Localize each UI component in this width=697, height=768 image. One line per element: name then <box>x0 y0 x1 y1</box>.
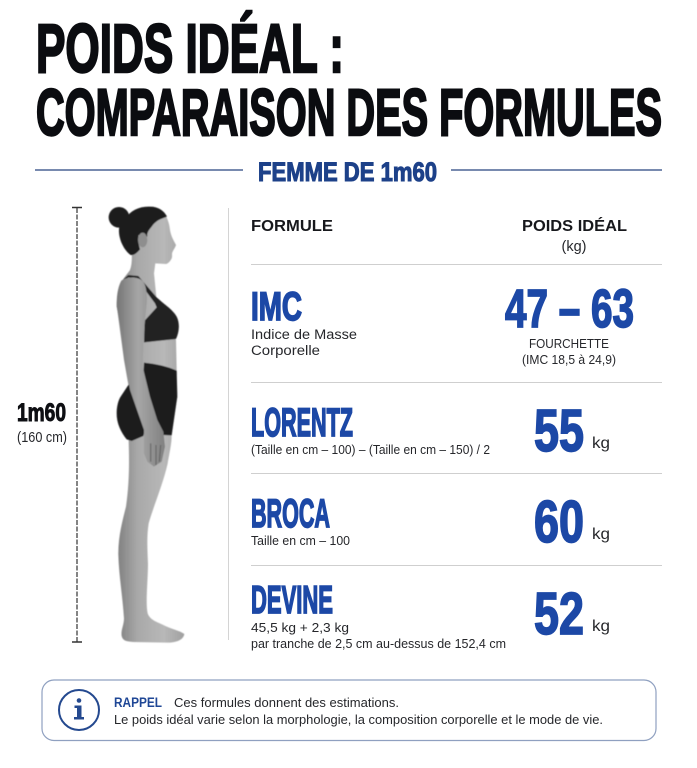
callout: rappel: Le poids idéal varie selon la morphologie, la composition corporelle et le mode de vie. <box>114 713 603 727</box>
height label: (160 cm) <box>17 429 67 446</box>
row: Broca: kg <box>592 526 610 543</box>
callout: rappel: RAPPEL <box>114 695 162 710</box>
height label <box>17 399 67 446</box>
row: Lorentz: LORENTZ <box>251 401 353 445</box>
row: IMC: FOURCHETTE <box>529 337 609 351</box>
row: Broca: BROCA <box>251 492 330 536</box>
callout: rappel <box>42 680 656 740</box>
hair <box>119 207 167 255</box>
row: Broca: Taille en cm – 100 <box>251 534 350 548</box>
icon: info <box>59 690 99 730</box>
height measure line <box>72 208 82 642</box>
height label: 1m60 <box>17 399 66 427</box>
fingers <box>151 443 161 465</box>
row: Devine: par tranche de 2,5 cm au-dessus de 152,4 cm <box>251 637 506 651</box>
subtitle: femme de 1m60: FEMME DE 1m60 <box>258 157 437 187</box>
row: Broca: 60 <box>534 489 584 555</box>
table header: FORMULE <box>251 218 333 235</box>
row: IMC: (IMC 18,5 à 24,9) <box>522 353 616 367</box>
row: Lorentz <box>251 398 610 464</box>
arm <box>117 278 165 467</box>
table header <box>251 218 627 255</box>
row: Lorentz: 55 <box>534 398 584 464</box>
shorts <box>117 363 177 441</box>
row: IMC: IMC <box>251 285 302 329</box>
table header: POIDS IDÉAL <box>522 218 627 235</box>
row: IMC <box>251 279 634 367</box>
row: Lorentz: kg <box>592 435 610 452</box>
hair bun <box>109 207 129 228</box>
body skin <box>117 210 184 643</box>
row: Devine: 45,5 kg + 2,3 kg <box>251 621 349 635</box>
row: Broca <box>251 489 610 555</box>
row: IMC: Indice de Masse <box>251 327 357 342</box>
ear <box>138 233 147 247</box>
table header: (kg) <box>562 239 586 255</box>
row: Lorentz: (Taille en cm – 100) – (Taille en cm – 150) / 2 <box>251 443 490 457</box>
row: Devine: kg <box>592 618 610 635</box>
row: Devine <box>251 579 610 651</box>
sports bra <box>122 275 179 342</box>
row: IMC: Corporelle <box>251 343 320 358</box>
row: IMC: 47 – 63 <box>505 279 634 339</box>
callout: rappel: Ces formules donnent des estimations. <box>174 696 399 710</box>
title: POIDS IDÉAL : <box>36 10 344 87</box>
title <box>36 10 662 149</box>
row: Devine: DEVINE <box>251 579 333 622</box>
figure: woman in profile <box>109 207 184 643</box>
column divider <box>228 208 230 640</box>
row: Devine: 52 <box>534 581 584 647</box>
